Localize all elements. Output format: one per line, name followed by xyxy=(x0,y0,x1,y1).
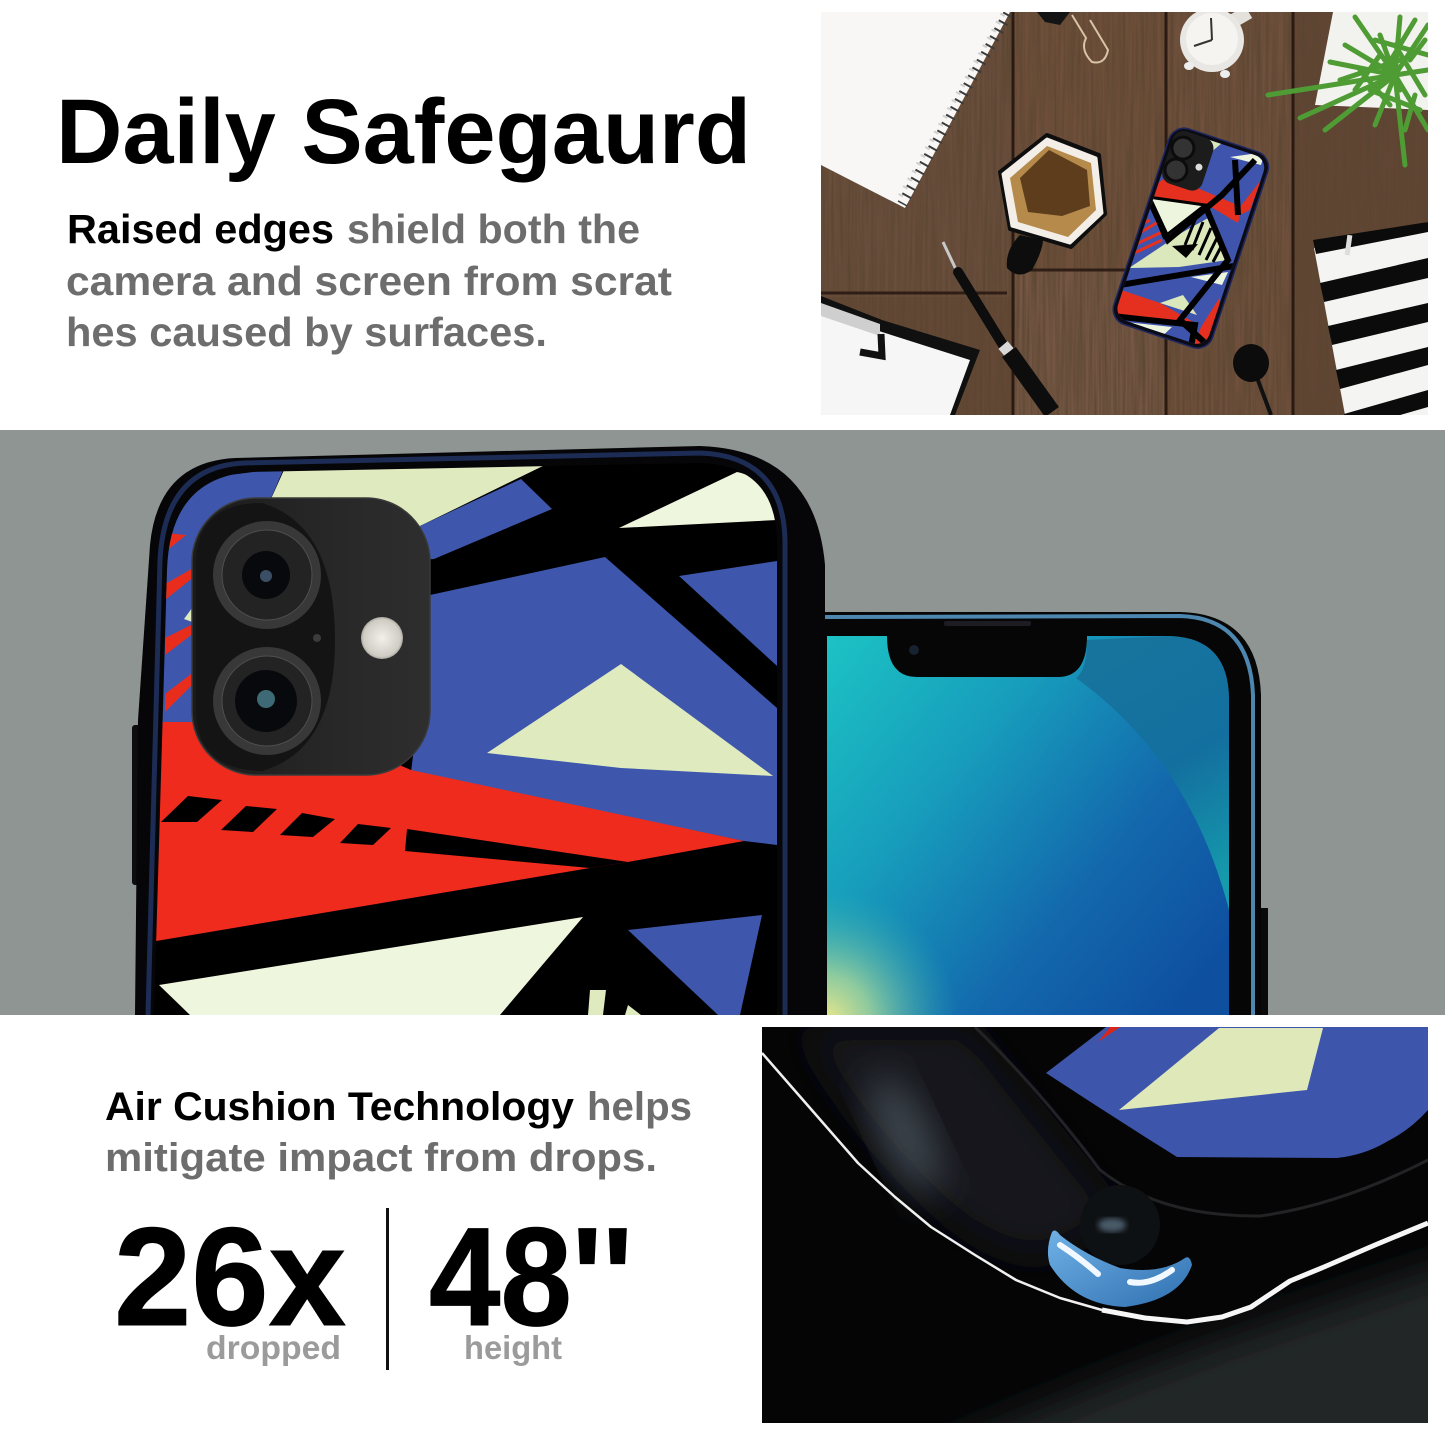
text block: air cushion: Air Cushion Technology xyxy=(105,1085,575,1129)
text block: air cushion: mitigate impact from drops. xyxy=(105,1136,657,1180)
text block: air cushion: helps xyxy=(587,1085,692,1129)
alarm clock xyxy=(1180,6,1252,78)
spiral notebook xyxy=(821,12,1010,208)
case art xyxy=(150,460,780,1020)
stat: 48 inch height: 48'' xyxy=(429,1198,633,1355)
striped notebook xyxy=(1313,222,1428,430)
pale triangle xyxy=(1119,1028,1323,1110)
text block: raised edges: Raised edges xyxy=(67,206,334,252)
flash xyxy=(361,617,403,659)
notch sensors xyxy=(909,621,1031,655)
surface shading xyxy=(982,1260,1428,1423)
stat: 26x dropped: dropped xyxy=(206,1329,341,1366)
pen xyxy=(943,242,1052,412)
stat: 48 inch height: height xyxy=(464,1329,562,1366)
bottom lens xyxy=(213,647,321,755)
clipboard xyxy=(821,296,980,415)
text block: raised edges: hes caused by surfaces. xyxy=(66,309,547,355)
mini camera xyxy=(1162,131,1214,191)
top lens xyxy=(213,521,321,629)
text block: raised edges: camera and screen from scrat xyxy=(66,258,672,304)
white rim line right xyxy=(1102,1223,1428,1322)
phone edge highlight xyxy=(859,1068,951,1202)
mini phone with geometric case xyxy=(1112,127,1270,349)
front-facing phone xyxy=(820,612,1268,1018)
camera module xyxy=(192,498,430,775)
rear phone with geometric case xyxy=(132,446,825,1020)
black dashes xyxy=(161,796,628,868)
title: Daily Safegaurd xyxy=(56,81,751,183)
text block: air cushion xyxy=(105,1085,692,1180)
coffee mug xyxy=(1000,135,1105,275)
panel: grey band with phones xyxy=(0,430,1445,1020)
case art xyxy=(1117,140,1264,344)
text block: raised edges: shield both the xyxy=(347,206,640,252)
phone screen wallpaper xyxy=(827,636,1229,1015)
stat: 26x dropped: 26x xyxy=(114,1198,346,1355)
spoon xyxy=(1233,344,1271,415)
wood planks xyxy=(821,12,1428,415)
potted plant xyxy=(1268,12,1428,165)
panel: water drop close-up photo xyxy=(762,1027,1445,1445)
binder clip xyxy=(1037,12,1108,62)
white rim line left xyxy=(762,1052,1102,1312)
phone edge band xyxy=(820,1027,1098,1254)
stat divider xyxy=(386,1208,389,1370)
panel: desk photo with phone xyxy=(821,6,1428,430)
red sliver xyxy=(1098,1027,1120,1042)
text block: raised edges xyxy=(66,206,672,355)
microphone dot xyxy=(313,634,321,642)
water drop xyxy=(1048,1185,1192,1307)
case blue panel xyxy=(1046,1027,1428,1158)
phone edge outline xyxy=(975,1027,1428,1216)
